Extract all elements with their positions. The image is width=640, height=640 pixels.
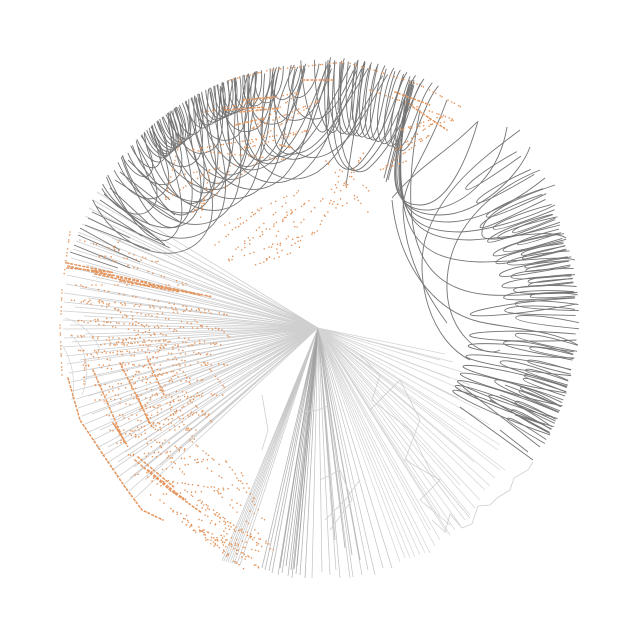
upper right sweeping arcs bbox=[392, 84, 578, 360]
orange scattered leaves, top side bbox=[165, 62, 463, 265]
orange scattered leaves, left side bbox=[70, 240, 275, 570]
radial tree chart bbox=[60, 8, 580, 578]
lower right spikes bbox=[451, 297, 577, 460]
top left scalloped arcs bbox=[89, 8, 400, 256]
bottom fan of darker radial branches bbox=[262, 328, 392, 578]
pale wandering branches along lower right edge bbox=[262, 355, 533, 532]
lower right fan of pale radial branches bbox=[318, 328, 505, 562]
dark dense spike clusters along top edge bbox=[70, 51, 438, 268]
left fan of light radial branches bbox=[62, 192, 318, 565]
orange dense streaks and edge leaves bbox=[60, 232, 230, 520]
right edge spikes bbox=[463, 151, 580, 353]
